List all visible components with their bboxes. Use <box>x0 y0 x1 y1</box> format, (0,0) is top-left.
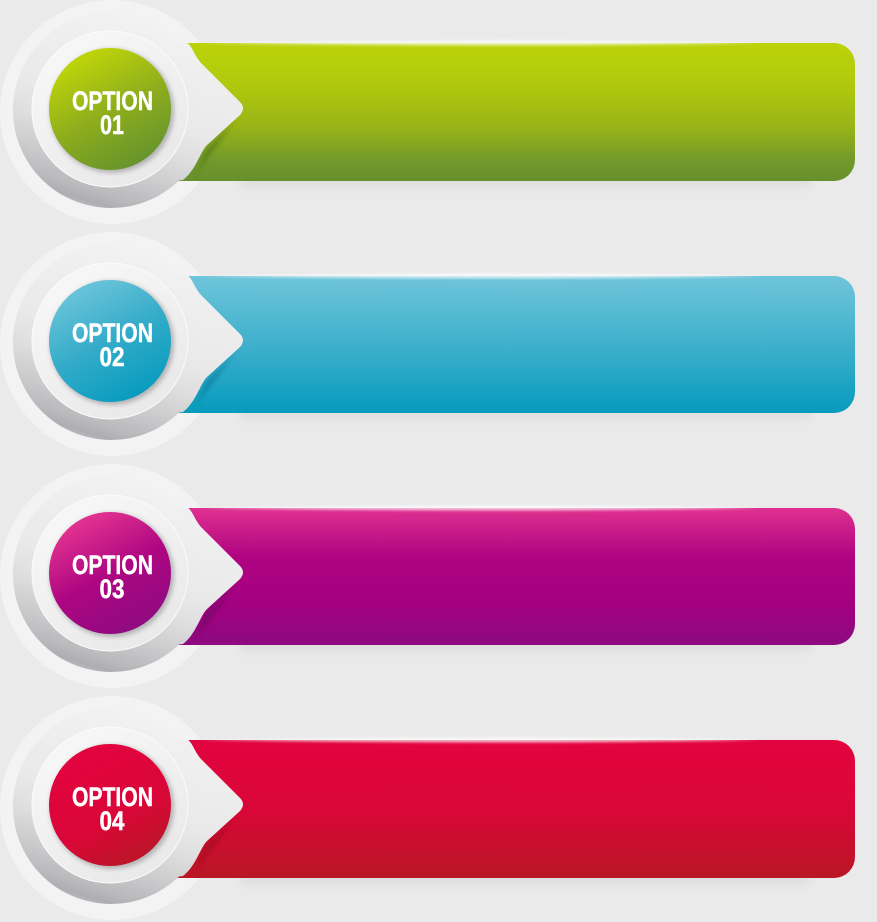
label 03 <box>72 550 153 604</box>
top highlight 03 <box>200 506 760 510</box>
label 03: OPTION <box>72 550 153 580</box>
option 03 row <box>0 464 855 688</box>
outer halo 04 <box>0 696 224 920</box>
badge shadow 01 <box>50 49 174 173</box>
top highlight 01 <box>200 40 760 46</box>
badge 02 <box>49 280 171 402</box>
banner 03 <box>150 508 855 645</box>
inner ring 04 <box>32 727 188 883</box>
metal disc with pointer 04 <box>13 708 243 904</box>
inner ring 03 <box>32 495 188 651</box>
label 02 <box>72 318 153 372</box>
top highlight 02 <box>200 274 760 278</box>
inner ring 01 <box>32 31 188 187</box>
label 01 <box>72 86 153 140</box>
outer halo 03 <box>0 464 224 688</box>
pointer shadow 02 <box>195 352 236 408</box>
badge 03 <box>49 512 171 634</box>
badge 01 <box>49 48 171 170</box>
pointer shadow 01 <box>195 120 236 176</box>
badge shadow 03 <box>50 513 174 637</box>
label 01: OPTION <box>72 86 153 116</box>
badge shadow 02 <box>50 281 174 405</box>
label 04: OPTION <box>72 782 153 812</box>
banner 04 <box>150 740 855 878</box>
badge 04 <box>49 744 171 866</box>
option 02 row <box>0 232 855 456</box>
label 03: 03 <box>100 574 124 604</box>
bar shadow 04 <box>240 874 810 882</box>
pointer shadow 04 <box>195 816 236 872</box>
label 02: 02 <box>100 342 124 372</box>
bar shadow 02 <box>240 409 810 417</box>
outer halo 01 <box>0 0 224 224</box>
option 04 row <box>0 696 855 920</box>
option 01 row <box>0 0 855 224</box>
label 04: 04 <box>100 806 124 836</box>
pointer shadow 03 <box>195 584 236 640</box>
metal disc with pointer 02 <box>13 244 243 440</box>
top highlight 04 <box>200 738 760 742</box>
label 01: 01 <box>100 110 124 140</box>
banner 02 <box>150 276 855 413</box>
outer halo 02 <box>0 232 224 456</box>
metal disc with pointer 03 <box>13 476 243 672</box>
metal disc with pointer 01 <box>13 12 243 208</box>
label 02: OPTION <box>72 318 153 348</box>
bar shadow 01 <box>240 177 810 185</box>
inner ring 02 <box>32 263 188 419</box>
badge shadow 04 <box>50 745 174 869</box>
label 04 <box>72 782 153 836</box>
bar shadow 03 <box>240 641 810 649</box>
banner 01 <box>150 43 855 181</box>
